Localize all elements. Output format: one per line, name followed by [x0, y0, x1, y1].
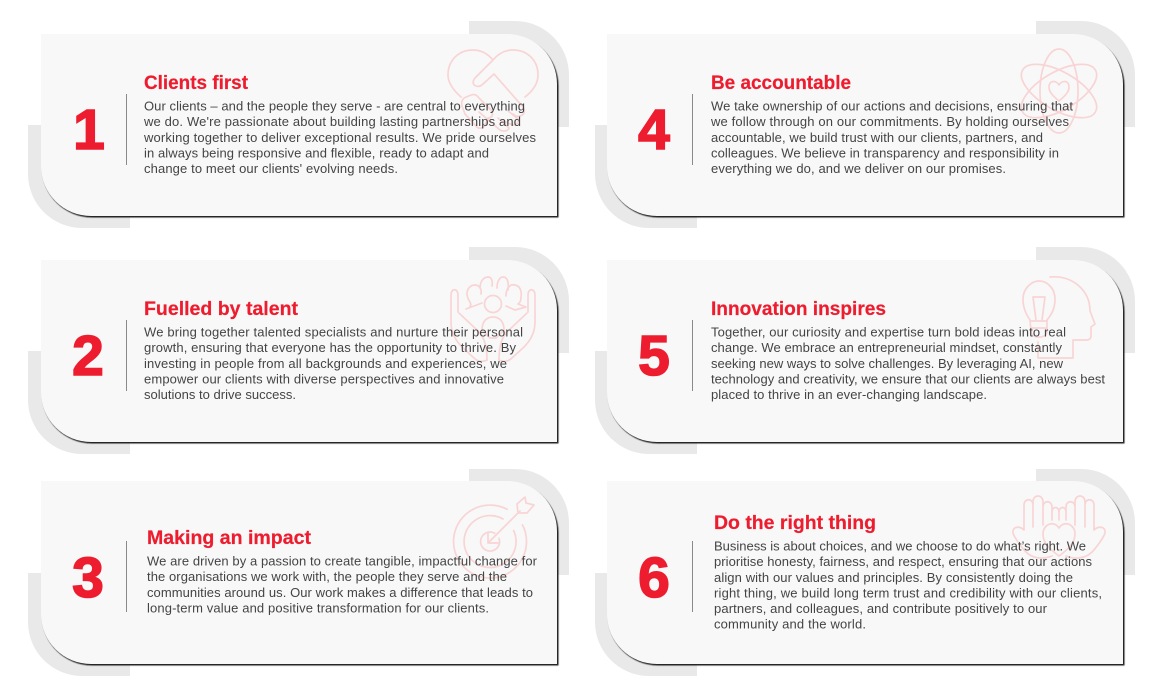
heading: Making an impact [147, 528, 312, 549]
icon: hands with heart [1013, 496, 1105, 558]
body text: seeking new ways to solve challenges. By leveraging AI, new [711, 356, 1064, 371]
body text: align with our values and principles. By consistently doing the [714, 570, 1073, 585]
body text: Together, our curiosity and expertise turn bold ideas into real [711, 324, 1066, 340]
icon: head with light bulb [1023, 277, 1095, 358]
body text: we follow through on our commitments. By holding ourselves [710, 114, 1070, 129]
body text [144, 324, 523, 402]
panel: 2 Fuelled by talent [28, 247, 569, 454]
heading: Innovation inspires [711, 299, 886, 320]
divider [126, 320, 128, 391]
heading: Clients first [144, 73, 249, 94]
number 2: 2 [72, 324, 104, 388]
icon: target with arrow [454, 497, 534, 578]
body text: Business is about choices, and we choose to do what’s right. We [714, 538, 1086, 554]
body text [711, 324, 1105, 402]
icon: atom with heart [1013, 49, 1105, 133]
panel: 4 Be accountable [595, 21, 1135, 228]
body text: we do. We're passionate about building lasting partnerships and [143, 114, 521, 129]
number 4: 4 [638, 98, 670, 162]
body text: long-term value and positive transformation for our clients. [147, 600, 489, 616]
divider [692, 541, 694, 612]
number 5: 5 [638, 324, 670, 388]
body text: solutions to drive success. [144, 387, 296, 402]
body text: the organisations we work with, the people they serve and the [147, 569, 507, 584]
body text: Our clients – and the people they serve - are central to everything [144, 98, 525, 114]
body text: change. We embrace an entrepreneurial mindset, constantly [711, 340, 1062, 355]
body text: prioritise honesty, fairness, and respect, ensuring that our actions [714, 554, 1092, 569]
body text [710, 98, 1073, 176]
body text: colleagues. We believe in transparency and responsibility in [711, 146, 1059, 160]
icon: heart handshake [448, 50, 538, 131]
body text: We take ownership of our actions and decisions, ensuring that [711, 98, 1073, 114]
divider [126, 541, 128, 612]
divider [692, 320, 694, 391]
body text: communities around us. Our work makes a difference that leads to [147, 585, 533, 600]
panel: 5 Innovation inspires [595, 247, 1135, 454]
body text: partners, and colleagues, and contribute positively to our [714, 601, 1048, 616]
panel: 3 Making an impact [28, 469, 569, 676]
body text [143, 98, 536, 176]
body text [714, 538, 1102, 632]
body text: placed to thrive in an ever-changing landscape. [711, 387, 987, 402]
body text: accountable, we build trust with our clients, partners, and [711, 130, 1043, 145]
number 3: 3 [72, 546, 104, 610]
body text: technology and creativity, we ensure that our clients are always best [711, 372, 1105, 386]
body text: everything we do, and we deliver on our promises. [711, 161, 1006, 176]
heading: Be accountable [711, 73, 851, 94]
body text: empower our clients with diverse perspectives and innovative [144, 372, 504, 386]
body text: community and the world. [714, 616, 866, 632]
divider [692, 94, 694, 165]
body text: in always being responsive and flexible, ready to adapt and [144, 146, 489, 160]
panel: 6 Do the right thing [595, 469, 1135, 676]
body text: right thing, we build long term trust and credibility with our clients, [714, 586, 1102, 600]
body text: We are driven by a passion to create tangible, impactful change for [147, 554, 538, 568]
number 6: 6 [638, 546, 670, 610]
body text: investing in people from all backgrounds and experiences, we [144, 356, 507, 371]
body text: working together to deliver exceptional results. We pride ourselves [143, 130, 536, 145]
body text: We bring together talented specialists and nurture their personal [144, 324, 523, 340]
panel: 1 Clients first [28, 21, 569, 228]
body text [147, 554, 538, 616]
heading: Do the right thing [714, 513, 876, 534]
heading: Fuelled by talent [144, 299, 299, 320]
body text: change to meet our clients' evolving needs. [144, 161, 398, 176]
body text: growth, ensuring that everyone has the opportunity to thrive. By [144, 340, 516, 355]
number 1: 1 [73, 98, 105, 162]
icon: hands holding people [451, 277, 535, 361]
divider [126, 94, 128, 165]
